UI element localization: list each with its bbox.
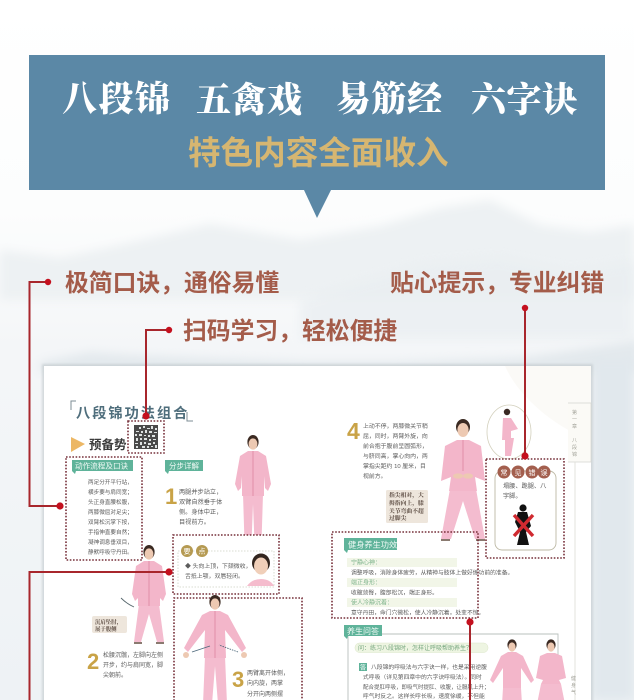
figure: hands at waist [536, 639, 566, 700]
step 3 text [232, 667, 289, 698]
step 2 [87, 649, 163, 679]
verse text: 双臂松沉掌下按， [88, 518, 133, 526]
verse text: 手指伸直要自然； [88, 528, 133, 536]
step 1: 两腿并步站立， [179, 488, 222, 496]
answer text: 式呼吸（详见第四章中的六字诀呼吸法）。同时 [363, 673, 482, 681]
panel: health benefits [332, 532, 513, 618]
question bubble [355, 643, 488, 652]
step 4: 掌指尖距约 10 厘米，目 [363, 462, 426, 470]
verse text: 两足分开平行站， [88, 478, 133, 486]
step 2: 松腰沉髋，左脚向左侧 [103, 651, 163, 659]
vertical margin text: 身 [571, 682, 576, 689]
feature label: tips: 贴心提示，专业纠错 [390, 270, 604, 297]
benefit list: 调整呼吸，消除身体疲劳，从精神与肢体上做好练功前的准备。 [351, 568, 513, 576]
green label [344, 625, 382, 639]
step 4 [347, 418, 428, 480]
feature label: mnemonics: 极简口诀，通俗易懂 [65, 270, 279, 297]
chapter tab [568, 403, 591, 700]
panel: common mistakes [486, 459, 564, 558]
banner title: four practices: 五禽戏 [196, 81, 303, 120]
benefit list: 使人冷静沉着： [351, 598, 393, 606]
step 3 text: 向内旋，两掌 [247, 679, 283, 687]
label: step details [165, 460, 203, 474]
connector: benefits [466, 618, 474, 700]
step 3 text: 3 [232, 667, 244, 692]
mistake text: 塌腰、跪腿、八 [503, 482, 547, 490]
side view inset [487, 405, 531, 459]
panel: key points [173, 535, 279, 594]
step 1: 侧。身体中正， [179, 508, 222, 516]
tip: shoulders: 展于腹侧 [95, 625, 117, 633]
answer text [359, 663, 490, 700]
panel: movement mnemonic [66, 457, 142, 560]
verse text: 横步要与肩同宽； [88, 488, 133, 496]
chapter tab: 章 [572, 423, 577, 430]
chapter tab: 锦 [572, 451, 577, 458]
key point text: ◆ 头向上顶，下颏微收， [185, 562, 251, 570]
panel: key points: 舌抵上颚，双唇轻闭。 [185, 572, 244, 580]
tip: fingers [386, 490, 428, 523]
banner title: four practices [62, 80, 578, 120]
tip: shoulders: 沉肩坠肘， [95, 618, 122, 627]
badges [498, 466, 550, 478]
banner subtitle: 特色内容全面收入 [188, 134, 449, 171]
green label: 健身养生功效 [348, 540, 397, 550]
benefit list: 端正身形： [351, 578, 381, 586]
step 4: 视前方。 [363, 472, 387, 480]
vertical margin text [571, 675, 576, 696]
badges [181, 545, 208, 557]
vertical margin text: 健 [571, 675, 576, 682]
step 4: 屈，同时，两臂外旋，向 [363, 432, 428, 440]
step 3 text: 两臂离开体侧， [247, 669, 289, 677]
question bubble: 问：练习八段锦时，怎样让呼吸帮助养生？ [358, 644, 472, 652]
badges: 见 [514, 469, 522, 477]
chapter tab: 第 [572, 409, 577, 416]
banner panel with pointer [29, 55, 605, 218]
connector: key points [30, 568, 173, 700]
step 2: 2 [87, 649, 99, 674]
arrow: motion left of figure [121, 598, 134, 607]
book spread page [42, 364, 593, 700]
connector: tips to mistakes [521, 305, 529, 460]
section title: 八段锦功法组合 [76, 405, 189, 422]
tip: shoulders [92, 616, 127, 633]
figure: arms spread [490, 639, 534, 700]
arrows: arm direction [192, 645, 238, 652]
answer text: 答 [360, 664, 366, 672]
badges: 常 [500, 468, 508, 477]
verse text [88, 478, 133, 556]
banner title: four practices: 八段锦 [62, 80, 172, 119]
chapter tab: 八 [572, 438, 577, 444]
small side-view figure [502, 409, 518, 456]
figure: step 3 arms spread [183, 595, 247, 700]
tip: fingers: 指尖相对，大 [389, 491, 424, 500]
benefit list [347, 558, 513, 616]
panel: step 3 [174, 595, 302, 700]
heading: preparation [71, 437, 127, 452]
connector: mnemonics [30, 279, 64, 510]
vertical margin text: 气 [571, 689, 576, 696]
step 1: 双臂自然垂于体 [179, 498, 223, 506]
figure: step 2 [132, 545, 166, 644]
step 4: 上动不停，两膝微关节稍 [363, 422, 428, 430]
verse text: 两膝微屈对足尖； [88, 508, 133, 516]
banner title: four practices: 易筋经 [336, 80, 444, 119]
verse text: 静默呼吸守丹田。 [88, 548, 133, 556]
figure: step 1 standing [235, 435, 271, 544]
badges: 误 [540, 468, 548, 477]
panel: common mistakes: 字脚。 [503, 492, 522, 500]
tip: fingers: 过脚尖 [389, 514, 408, 522]
QR code [128, 421, 164, 453]
tip: fingers: 拇指向上，膝 [389, 499, 424, 508]
step 2: 开步，约与肩同宽，脚 [103, 661, 163, 669]
badges: 点 [198, 548, 206, 556]
badges: 要 [184, 548, 190, 556]
green label [344, 538, 397, 553]
answer text: 八段锦的呼吸法与六字诀一样，也是采用逆腹 [371, 663, 487, 671]
benefit list: 收髋敛臀，腹部松沉，端正身形。 [351, 588, 438, 596]
step 2: 尖朝前。 [103, 671, 127, 679]
portrait [247, 554, 274, 586]
connector: QR [142, 327, 172, 420]
step 1: 1 [165, 484, 177, 509]
chapter tab: 段 [572, 444, 577, 451]
verse text: 头正身直腰松腹， [88, 498, 133, 506]
panel: health Q and A [344, 625, 576, 700]
step 1 [165, 484, 223, 526]
step 3 text: 分开向两侧摆 [247, 690, 283, 698]
badges: 错 [528, 468, 536, 477]
answer text: 配合提肛呼吸，即吸气时提肛、收腹，让膈肌上升； [363, 683, 490, 691]
feature label: QR: 扫码学习，轻松便捷 [183, 318, 397, 345]
benefit list: 宁静心神： [351, 558, 381, 566]
tip: fingers: 关节弯曲不超 [389, 507, 424, 515]
green label: 养生问答 [347, 626, 379, 636]
icon: gold arrow [71, 437, 85, 452]
step 1: 目视前方。 [179, 518, 210, 526]
answer text: 呼气时反之。这样长呼长吸，速度徐缓，不但能 [363, 692, 485, 700]
green label: 动作流程及口诀 [75, 460, 129, 470]
benefit list: 意守丹田，命门穴微松，使人冷静沉着，处变不惊。 [351, 608, 484, 616]
step 4: 前合抱于腹前呈圆弧形， [363, 442, 428, 450]
label: step details: 分步详解 [169, 460, 199, 470]
banner [29, 55, 605, 218]
figure: step 4 horse stance [441, 419, 485, 541]
verse text: 凝神调息垂双目， [88, 538, 133, 546]
silhouette with red cross [514, 504, 533, 545]
step 4: 4 [347, 418, 360, 444]
banner title: four practices: 六字诀 [471, 81, 578, 120]
heading: preparation: 预备势 [89, 437, 127, 452]
chapter tab: 一 [572, 417, 577, 423]
step 4: 与脐同高，掌心向内，两 [363, 452, 428, 460]
